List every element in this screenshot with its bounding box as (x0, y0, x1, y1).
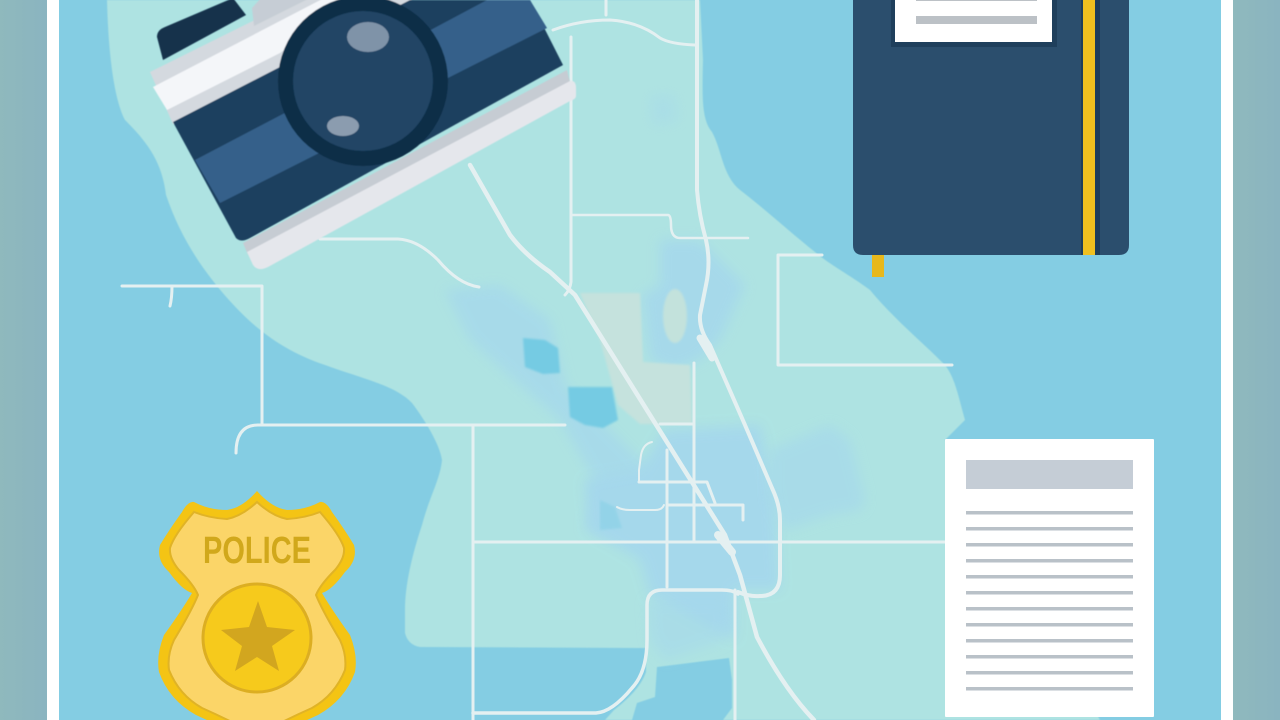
camera shutter button (252, 0, 312, 26)
document text lines (966, 511, 1133, 690)
roads (122, 0, 952, 720)
notebook cover (853, 0, 1129, 255)
notebook label (895, 0, 1052, 42)
beige district (580, 293, 692, 424)
camera viewfinder (157, 0, 246, 60)
camera bottom band shadow (243, 70, 570, 255)
badge inner plate (169, 502, 345, 720)
camera body (173, 0, 563, 240)
document page (945, 439, 1154, 717)
beige district small (663, 289, 687, 343)
icon: camera (150, 0, 576, 269)
right side background strip (1233, 0, 1280, 720)
notebook elastic shadow (1081, 0, 1100, 255)
document header block (966, 460, 1133, 489)
lens ring (278, 0, 448, 166)
notebook bookmark ribbon (872, 255, 884, 277)
notebook label shadow (891, 0, 1057, 47)
dark blue water bodies (523, 338, 622, 530)
badge star (221, 601, 295, 671)
notebook label line top (916, 0, 1037, 1)
icon: notebook (853, 0, 1129, 277)
map land mass (107, 0, 1100, 720)
camera bottom plate (247, 81, 576, 269)
notebook label line (916, 16, 1037, 24)
icon: police badge (158, 491, 356, 720)
badge text: POLICE (203, 530, 311, 572)
badge outer shield (158, 491, 356, 720)
badge seal (203, 584, 311, 692)
urban blue zones (445, 95, 865, 660)
camera lens (278, 0, 448, 166)
camera left blue band (195, 105, 335, 203)
camera top silver plate (150, 0, 420, 124)
camera right blue band (425, 0, 547, 82)
lens highlight top (347, 22, 389, 52)
icon: report document (945, 439, 1154, 717)
camera white strip (153, 0, 360, 110)
left side background strip (0, 0, 47, 720)
lens highlight bottom (327, 116, 359, 136)
lens glass (293, 11, 433, 151)
notebook elastic band (1083, 0, 1095, 255)
